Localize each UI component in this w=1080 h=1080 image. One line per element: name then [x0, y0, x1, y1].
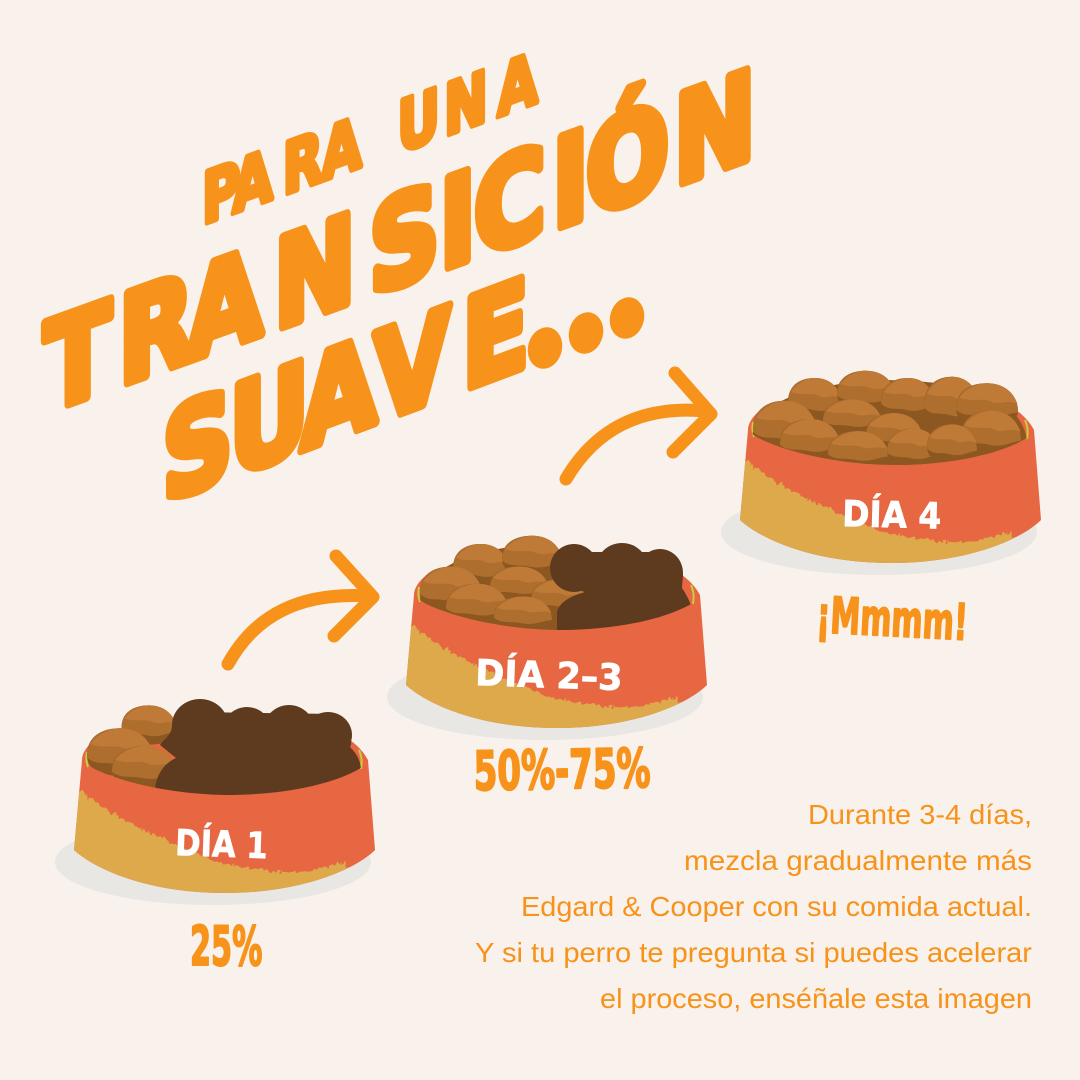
exclamation: ¡Mmmm!: ¡Mmmm! — [815, 586, 969, 652]
paragraph: instructions: mezcla gradualmente más — [684, 845, 1032, 876]
percentage: 50%-75%: 50%-75% — [473, 737, 651, 803]
label: DÍA 2-3: DÍA 2–3 — [475, 652, 623, 699]
bowl body — [721, 400, 1051, 575]
percentage: 25%: 25% — [190, 916, 262, 979]
title line: SUAVE...: SUAVE... — [162, 214, 630, 531]
paragraph: instructions: Y si tu perro te pregunta si puedes acelerar — [475, 937, 1032, 968]
food: all new kibble — [752, 370, 1027, 465]
bowl: day 4 — [721, 371, 1051, 575]
arrow: day 1 to day 2-3 — [228, 556, 373, 664]
paragraph: instructions: Edgard & Cooper con su comida actual. — [521, 891, 1032, 922]
bowl body — [55, 730, 385, 905]
arrow: day 2-3 to day 4 — [566, 373, 711, 479]
bowl: day 2-3 — [387, 536, 717, 740]
paragraph: instructions: Durante 3-4 días, — [808, 799, 1032, 830]
food: 25% new kibble, rest old food — [87, 699, 361, 795]
title — [44, 37, 756, 531]
label: DÍA 4: DÍA 4 — [842, 493, 942, 538]
title ellipsis dots — [523, 293, 649, 373]
title line: TRANSICIÓN: TRANSICIÓN — [44, 42, 756, 441]
label: DÍA 1: DÍA 1 — [175, 821, 268, 867]
paragraph: instructions: el proceso, enséñale esta imagen — [600, 983, 1032, 1014]
bowl body — [387, 565, 717, 740]
paragraph: instructions — [475, 799, 1032, 1014]
title line: PARA UNA: PARA UNA — [202, 37, 538, 241]
food: half new kibble, half old food — [420, 536, 690, 630]
bowl: day 1 — [55, 699, 385, 905]
